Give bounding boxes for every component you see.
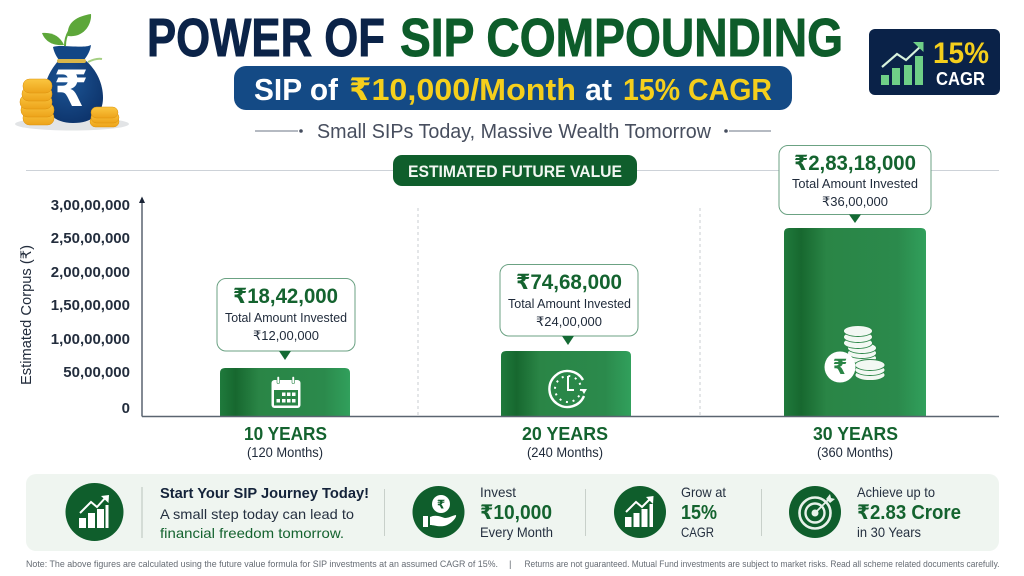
icon: growth chart — [66, 483, 124, 541]
callout: 10 years: ₹18,42,000 — [233, 285, 338, 308]
icon: hand holding rupee — [412, 486, 464, 538]
icon: calendar — [272, 376, 300, 408]
x label: 20 years — [522, 424, 608, 460]
icon: growth chart small — [614, 486, 666, 538]
text: start your SIP journey: financial freedom tomorrow. — [160, 525, 344, 541]
text: achieve: Achieve up to — [857, 484, 935, 500]
x label: 30 years: (360 Months) — [817, 445, 893, 460]
text: achieve — [857, 484, 961, 540]
footnote: | — [509, 559, 511, 570]
y axis labels: 2,50,00,000 — [51, 230, 130, 247]
badge: 15% CAGR: 15% — [933, 37, 989, 70]
icon: target — [789, 486, 841, 538]
y axis labels: 1,00,00,000 — [51, 331, 130, 348]
title — [147, 8, 843, 68]
callout: 30 years: ₹36,00,000 — [822, 194, 888, 209]
subtitle banner: ₹10,000/Month — [349, 72, 576, 107]
y axis labels: 2,00,00,000 — [51, 264, 130, 281]
text: achieve: ₹2.83 Crore — [857, 502, 961, 524]
text: invest: ₹10,000 — [480, 502, 552, 524]
subtitle banner: 15% CAGR — [623, 72, 772, 107]
text: grow at: CAGR — [681, 524, 714, 540]
text: start your SIP journey — [160, 486, 369, 541]
subtitle banner: at — [585, 72, 612, 107]
callout: 20 years: ₹74,68,000 — [516, 271, 622, 294]
bar chart — [19, 146, 999, 460]
x label: 10 years — [244, 424, 327, 460]
icon: money bag with coins: ₹ — [54, 61, 88, 117]
y axis labels — [51, 197, 130, 417]
callout: 30 years: ₹2,83,18,000 — [794, 152, 916, 175]
callout: 30 years — [779, 146, 931, 223]
subtitle banner: SIP of — [254, 72, 339, 107]
text: grow at: 15% — [681, 502, 717, 524]
x label: 10 years: 10 YEARS — [244, 424, 327, 444]
text: invest: Every Month — [480, 524, 553, 540]
text: grow at: Grow at — [681, 484, 726, 500]
icon: rupee coins — [824, 326, 885, 382]
y axis labels: 0 — [122, 400, 130, 417]
callout: 20 years: Total Amount Invested — [508, 297, 631, 311]
panel: call to action strip — [26, 474, 999, 551]
y axis labels: 3,00,00,000 — [51, 197, 130, 214]
y axis labels: 1,50,00,000 — [51, 297, 130, 314]
callout: 10 years: Total Amount Invested — [225, 311, 347, 325]
icon: hand holding rupee: ₹ — [437, 498, 445, 512]
badge: 15% CAGR: CAGR — [936, 69, 985, 89]
x label: 30 years: 30 YEARS — [813, 424, 898, 444]
tagline: Small SIPs Today, Massive Wealth Tomorrow — [317, 121, 712, 143]
text: grow at — [681, 484, 726, 540]
callout: 10 years: ₹12,00,000 — [253, 328, 319, 343]
x label: 20 years: (240 Months) — [527, 445, 603, 460]
callout: 30 years: Total Amount Invested — [792, 177, 918, 191]
bar: 20 years — [501, 351, 631, 416]
callout: 10 years — [217, 278, 355, 360]
title: POWER OF — [147, 8, 385, 68]
badge: 15% CAGR — [869, 29, 1000, 95]
icon: money bag with coins — [15, 14, 129, 130]
footnote: Note: The above figures are calculated using the future value formula for SIP investments at an assumed CAGR of 15%. — [26, 559, 498, 570]
footnote — [26, 559, 1000, 570]
bar: 10 years — [220, 368, 350, 416]
section heading: estimated future value: ESTIMATED FUTURE VALUE — [408, 162, 622, 181]
callout: 20 years — [500, 264, 638, 345]
x label: 30 years — [813, 424, 898, 460]
icon: clock — [549, 371, 587, 407]
x label: 10 years: (120 Months) — [247, 445, 323, 460]
text: invest — [480, 484, 553, 540]
x label: 20 years: 20 YEARS — [522, 424, 608, 444]
subtitle banner — [234, 66, 792, 110]
text: achieve: in 30 Years — [857, 524, 921, 540]
text: invest: Invest — [480, 484, 516, 500]
callout: 20 years: ₹24,00,000 — [536, 314, 602, 329]
title: SIP COMPOUNDING — [400, 8, 843, 68]
bar: 30 years — [784, 228, 926, 416]
y axis labels: 50,00,000 — [63, 364, 130, 381]
section heading: estimated future value — [393, 155, 637, 186]
axes — [139, 196, 999, 416]
text: start your SIP journey: A small step today can lead to — [160, 506, 354, 522]
icon: rupee coins: ₹ — [833, 356, 847, 379]
text: start your SIP journey: Start Your SIP Journey Today! — [160, 486, 369, 502]
y axis title: Estimated Corpus (₹) — [19, 245, 35, 385]
